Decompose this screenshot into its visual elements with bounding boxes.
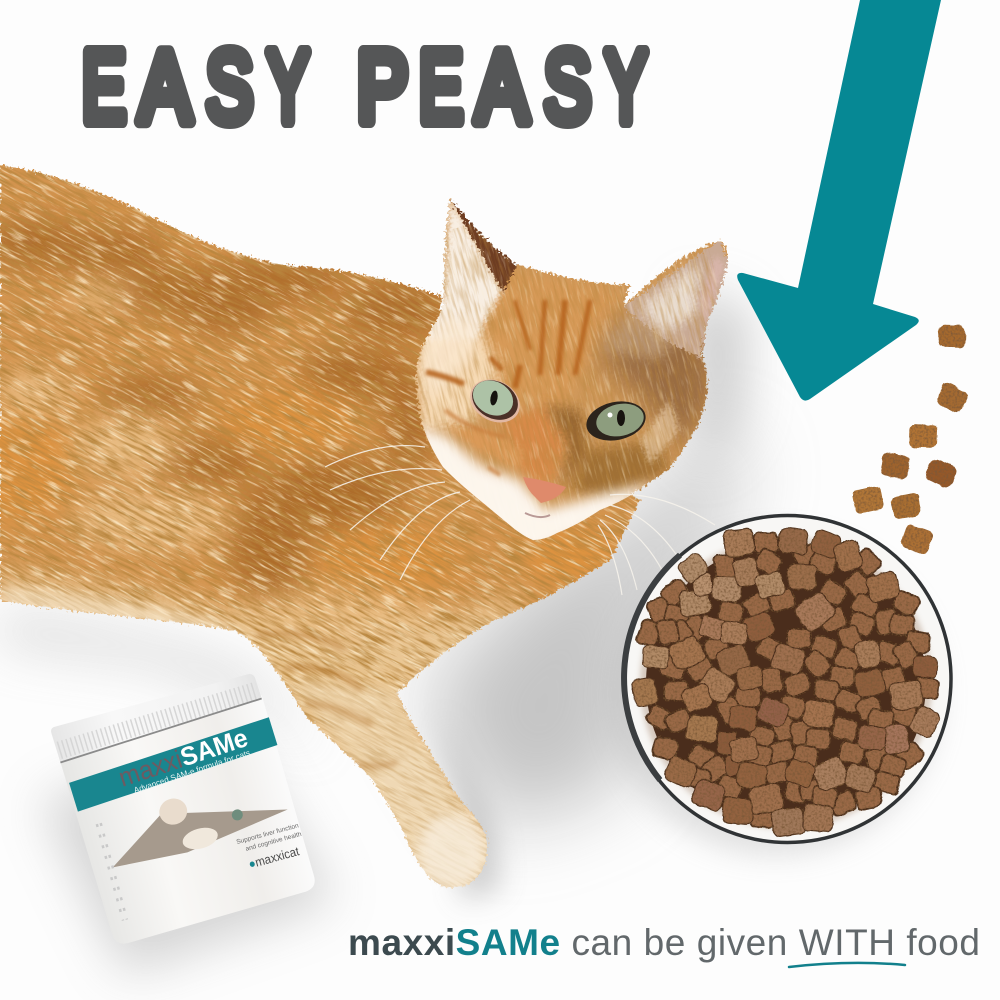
- label tagline: Supports liver function: [236, 822, 300, 846]
- right ear: [623, 240, 730, 358]
- lower layer: [635, 533, 940, 828]
- title: EASY PEASY: [82, 31, 647, 143]
- title: EASY PEASY: Y: [605, 31, 647, 143]
- cream brow: [420, 320, 480, 400]
- lid shadow line: [58, 698, 264, 762]
- rim thick left edge: [624, 555, 680, 780]
- right side brown: [600, 320, 715, 450]
- right eye: [583, 396, 649, 446]
- cat head: [415, 198, 728, 541]
- cast shadows: [0, 290, 745, 900]
- title: EASY PEASY: S: [206, 31, 253, 143]
- leg cream wash: [290, 680, 495, 895]
- tagline: maxxiSAMe can be given WITH food: [348, 922, 980, 963]
- food bowl: [610, 516, 951, 855]
- left eye: [463, 371, 527, 431]
- jar shadow: [40, 740, 335, 975]
- title: EASY PEASY: A: [139, 31, 191, 143]
- nose: [523, 477, 566, 503]
- title: EASY PEASY: S: [544, 31, 591, 143]
- upper layer: [631, 527, 941, 838]
- maxxicat logo: ●maxxicat: [247, 844, 301, 871]
- teal label band: [66, 717, 281, 812]
- leg: [280, 671, 487, 862]
- kitten photo: [99, 770, 292, 872]
- pale patches: [0, 281, 445, 648]
- cat: [0, 74, 772, 966]
- title: EASY PEASY: A: [476, 31, 528, 143]
- lid ribs: [58, 690, 259, 750]
- arrow pointing to the food bowl: [737, 0, 941, 401]
- label subtitle: Advanced SAM-e formula for cats: [132, 748, 251, 795]
- product jar: maxxiSAMe: and cognitive health: [245, 831, 303, 853]
- whiskers: [325, 446, 715, 595]
- mouth: [525, 513, 550, 517]
- label name: maxxiSAMe: [115, 722, 251, 793]
- cream left face: [415, 310, 500, 430]
- title: EASY PEASY: E: [82, 31, 126, 143]
- title: EASY PEASY: P: [357, 31, 408, 143]
- left ear: [420, 198, 503, 340]
- scattered kibble: [851, 325, 970, 555]
- paw: [419, 816, 485, 888]
- under left eye orange: [445, 425, 525, 470]
- orange patches: [0, 390, 620, 595]
- bowl rim: [624, 516, 951, 842]
- product jar: maxxiSAMe: [40, 671, 335, 975]
- fur streaks: [0, 165, 640, 887]
- cat body: [0, 74, 737, 966]
- jar body: [57, 695, 318, 948]
- side panel fine print: [97, 823, 127, 921]
- white muzzle and cheek: [421, 419, 654, 540]
- face stripes: [426, 300, 590, 388]
- jar lid: [50, 672, 264, 763]
- title: EASY PEASY: E: [419, 31, 463, 143]
- nose bridge: [502, 407, 564, 482]
- underline accent under WITH: [789, 963, 905, 967]
- title: EASY PEASY: Y: [267, 31, 309, 143]
- forehead orange: [549, 272, 615, 285]
- belly fringe wash: [0, 585, 240, 640]
- kibble pile: [631, 527, 941, 838]
- bowl shadow: [610, 535, 940, 855]
- dark bands: [0, 219, 450, 605]
- head fur streaks: [416, 224, 720, 511]
- leg stripes: [255, 633, 398, 766]
- cream belly fringe: [0, 572, 530, 700]
